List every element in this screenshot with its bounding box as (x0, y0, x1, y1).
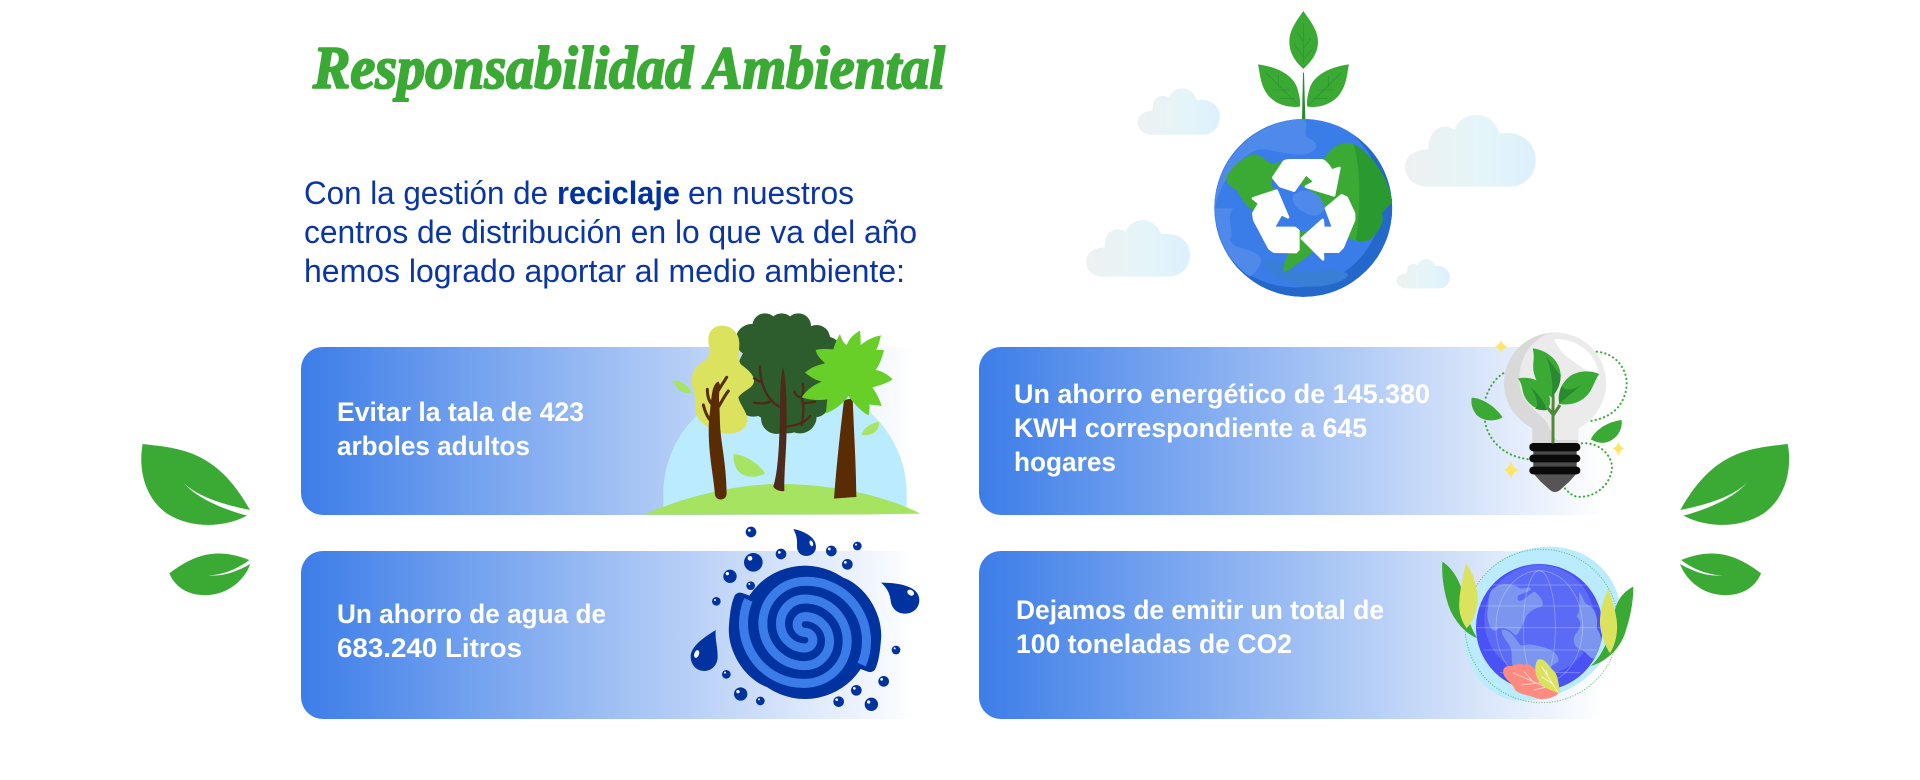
icon: right leaves (1680, 444, 1789, 595)
card text: trees (337, 397, 584, 461)
recycling symbol (1253, 160, 1354, 259)
icon: blue globe with leaves (1442, 547, 1633, 703)
panel: CO2 card (979, 547, 1633, 719)
intro paragraph: en nuestros (688, 175, 854, 211)
intro paragraph: hemos logrado aportar al medio ambiente: (304, 253, 905, 289)
plant sprout (1258, 11, 1349, 119)
intro paragraph: centros de distribución en lo que va del año (304, 214, 917, 250)
card text: energy: KWH correspondiente a 645 (1014, 413, 1367, 443)
icon: trees (643, 313, 921, 515)
card text: trees: arboles adultos (337, 431, 530, 461)
icon: earth with recycling symbol and clouds (1086, 11, 1536, 297)
card text: water: 683.240 Litros (337, 633, 522, 663)
cloud top left (1138, 88, 1220, 135)
intro paragraph: Con la gestión de (304, 175, 548, 211)
intro paragraph (304, 175, 917, 289)
intro paragraph: reciclaje (557, 175, 680, 211)
card text: energy: Un ahorro energético de 145.380 (1014, 379, 1430, 409)
panel: energy card (979, 333, 1627, 515)
icon: water spiral and drops (691, 527, 919, 711)
cloud lower right (1397, 259, 1450, 288)
card text: energy: hogares (1014, 447, 1116, 477)
cloud right (1405, 115, 1536, 187)
card text: water: Un ahorro de agua de (337, 599, 606, 629)
panel: trees card (301, 313, 941, 515)
panel: water card (301, 527, 941, 719)
title: Responsabilidad Ambiental (312, 35, 945, 101)
card text: CO2: 100 toneladas de CO2 (1016, 629, 1292, 659)
card text: CO2: Dejamos de emitir un total de (1016, 595, 1384, 625)
icon: light bulb with plant (1471, 333, 1627, 497)
card text: water (337, 599, 606, 663)
globe (1208, 113, 1392, 297)
icon: left leaves (141, 444, 250, 595)
cloud lower left (1086, 220, 1190, 277)
card text: CO2 (1016, 595, 1384, 659)
card text: trees: Evitar la tala de 423 (337, 397, 584, 427)
card text: energy (1014, 379, 1430, 477)
